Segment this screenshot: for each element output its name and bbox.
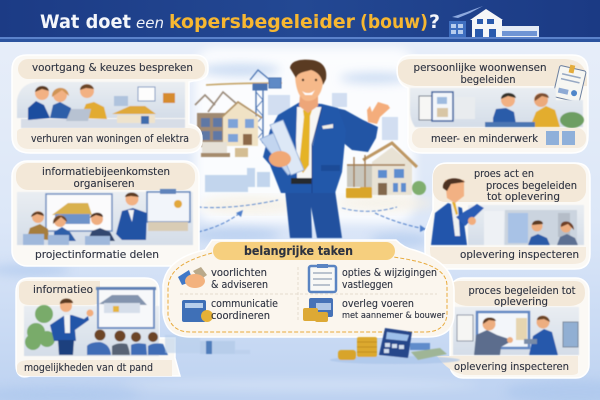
panel: informatieo	[16, 278, 180, 377]
heading	[433, 164, 586, 203]
heading: tot oplevering	[487, 192, 560, 203]
illustration: meeting	[17, 82, 185, 128]
illustration: two professionals	[453, 307, 579, 355]
task: voorlichten: & adviseren	[211, 280, 268, 291]
tie	[299, 110, 312, 173]
task: opties	[309, 264, 437, 292]
heading: oplevering	[494, 297, 548, 308]
jacket lapel line	[312, 107, 322, 193]
head	[295, 64, 323, 101]
title: Wat doet	[40, 11, 131, 33]
house on right	[346, 143, 426, 198]
icon: crane	[206, 70, 282, 143]
heading: begeleiden	[460, 75, 516, 86]
task: overleg: met aannemer & bouwer	[342, 310, 445, 321]
title: een	[136, 14, 164, 32]
jacket	[263, 102, 346, 193]
caption	[412, 128, 586, 148]
caption: oplevering inspecteren	[460, 250, 579, 261]
title: ?	[429, 11, 440, 33]
heading: voortgang & keuzes bespreken	[32, 63, 193, 74]
panel: persoonlijke woonwensen	[397, 55, 588, 153]
task: voorlichten	[178, 267, 268, 291]
caption: meer- en minderwerk	[431, 134, 538, 145]
house	[117, 115, 155, 123]
people	[28, 101, 50, 120]
heading	[16, 163, 195, 190]
raised hand	[367, 102, 390, 124]
heading	[18, 59, 205, 79]
title: kopersbegeleider	[169, 11, 356, 33]
heading	[398, 59, 587, 86]
icon: clipboard	[309, 264, 336, 292]
neck	[299, 95, 318, 113]
belt	[291, 178, 312, 184]
heading: belangrijke taken	[244, 243, 353, 258]
hand holding	[269, 151, 291, 167]
illustration: inspection	[431, 178, 584, 245]
caption: oplevering inspecteren	[454, 362, 569, 373]
dividers	[297, 267, 299, 322]
caption	[17, 360, 172, 376]
task: voorlichten: voorlichten	[211, 268, 267, 279]
pocket square	[322, 124, 333, 129]
heading	[452, 281, 585, 308]
scene: construction and houses behind the advisor	[195, 70, 426, 232]
icons: coins, calculator and money	[330, 328, 460, 364]
heading: proces begeleiden	[486, 181, 577, 192]
caption: projectinformatie delen	[35, 250, 159, 261]
building at bottom	[165, 335, 250, 354]
shirt	[296, 107, 322, 178]
icon: calculator	[182, 300, 213, 322]
smile	[302, 90, 315, 95]
illustration: consultation	[410, 88, 584, 128]
caption	[430, 247, 586, 264]
panel: proces begeleiden	[425, 163, 590, 269]
task: overleg: overleg voeren	[342, 299, 414, 310]
icon: floor plans	[546, 131, 575, 145]
task: opties: vastleggen	[342, 280, 393, 291]
rolled blueprints	[260, 120, 304, 175]
illustration: presentation	[17, 189, 193, 245]
caption: verhuren van woningen of elektra	[31, 134, 189, 145]
heading: informatiebijeenkomsten	[42, 167, 170, 178]
building distant left	[205, 168, 270, 192]
header banner	[0, 0, 600, 42]
hair	[290, 60, 326, 85]
title: (bouw)	[360, 11, 428, 33]
heading: proces begeleiden tot	[468, 286, 576, 297]
panel: voortgang en keuzes	[12, 55, 208, 153]
icon: contract	[553, 62, 587, 103]
heading: organiseren	[74, 179, 134, 190]
advisor figure	[260, 60, 390, 238]
house under construction	[195, 92, 262, 157]
icon: handshake	[178, 267, 207, 288]
trousers	[285, 190, 342, 238]
heading	[213, 242, 395, 260]
illustration: presenter	[24, 287, 168, 356]
task: opties: opties & wijzigingen	[342, 268, 437, 279]
dashed arrow	[198, 213, 240, 232]
task: communicatie: coordineren	[211, 311, 270, 322]
arm reaching	[336, 108, 378, 152]
caption: mogelijkheden van dt pand	[24, 363, 153, 374]
icon: stacks of gold	[346, 187, 372, 198]
heading: persoonlijke woonwensen	[414, 63, 546, 74]
dashed outline	[168, 253, 447, 332]
panel: proces begeleiden tot oplevering	[437, 278, 589, 378]
heading	[19, 281, 100, 305]
panel: informatiebijeenkomsten	[12, 161, 199, 266]
panel: belangrijke taken	[163, 240, 454, 337]
heading: proes act en	[474, 169, 534, 180]
task: communicatie: communicatie	[211, 299, 278, 310]
task: overleg	[303, 298, 445, 322]
heading: informatieo	[33, 285, 93, 296]
icon: coins and folder	[303, 298, 333, 322]
dashed arrow to inspection	[342, 207, 397, 211]
caption	[437, 356, 578, 375]
caption	[17, 128, 200, 149]
pocket	[321, 165, 340, 171]
icon: houses in header	[449, 6, 539, 37]
task: communicatie	[182, 299, 278, 322]
